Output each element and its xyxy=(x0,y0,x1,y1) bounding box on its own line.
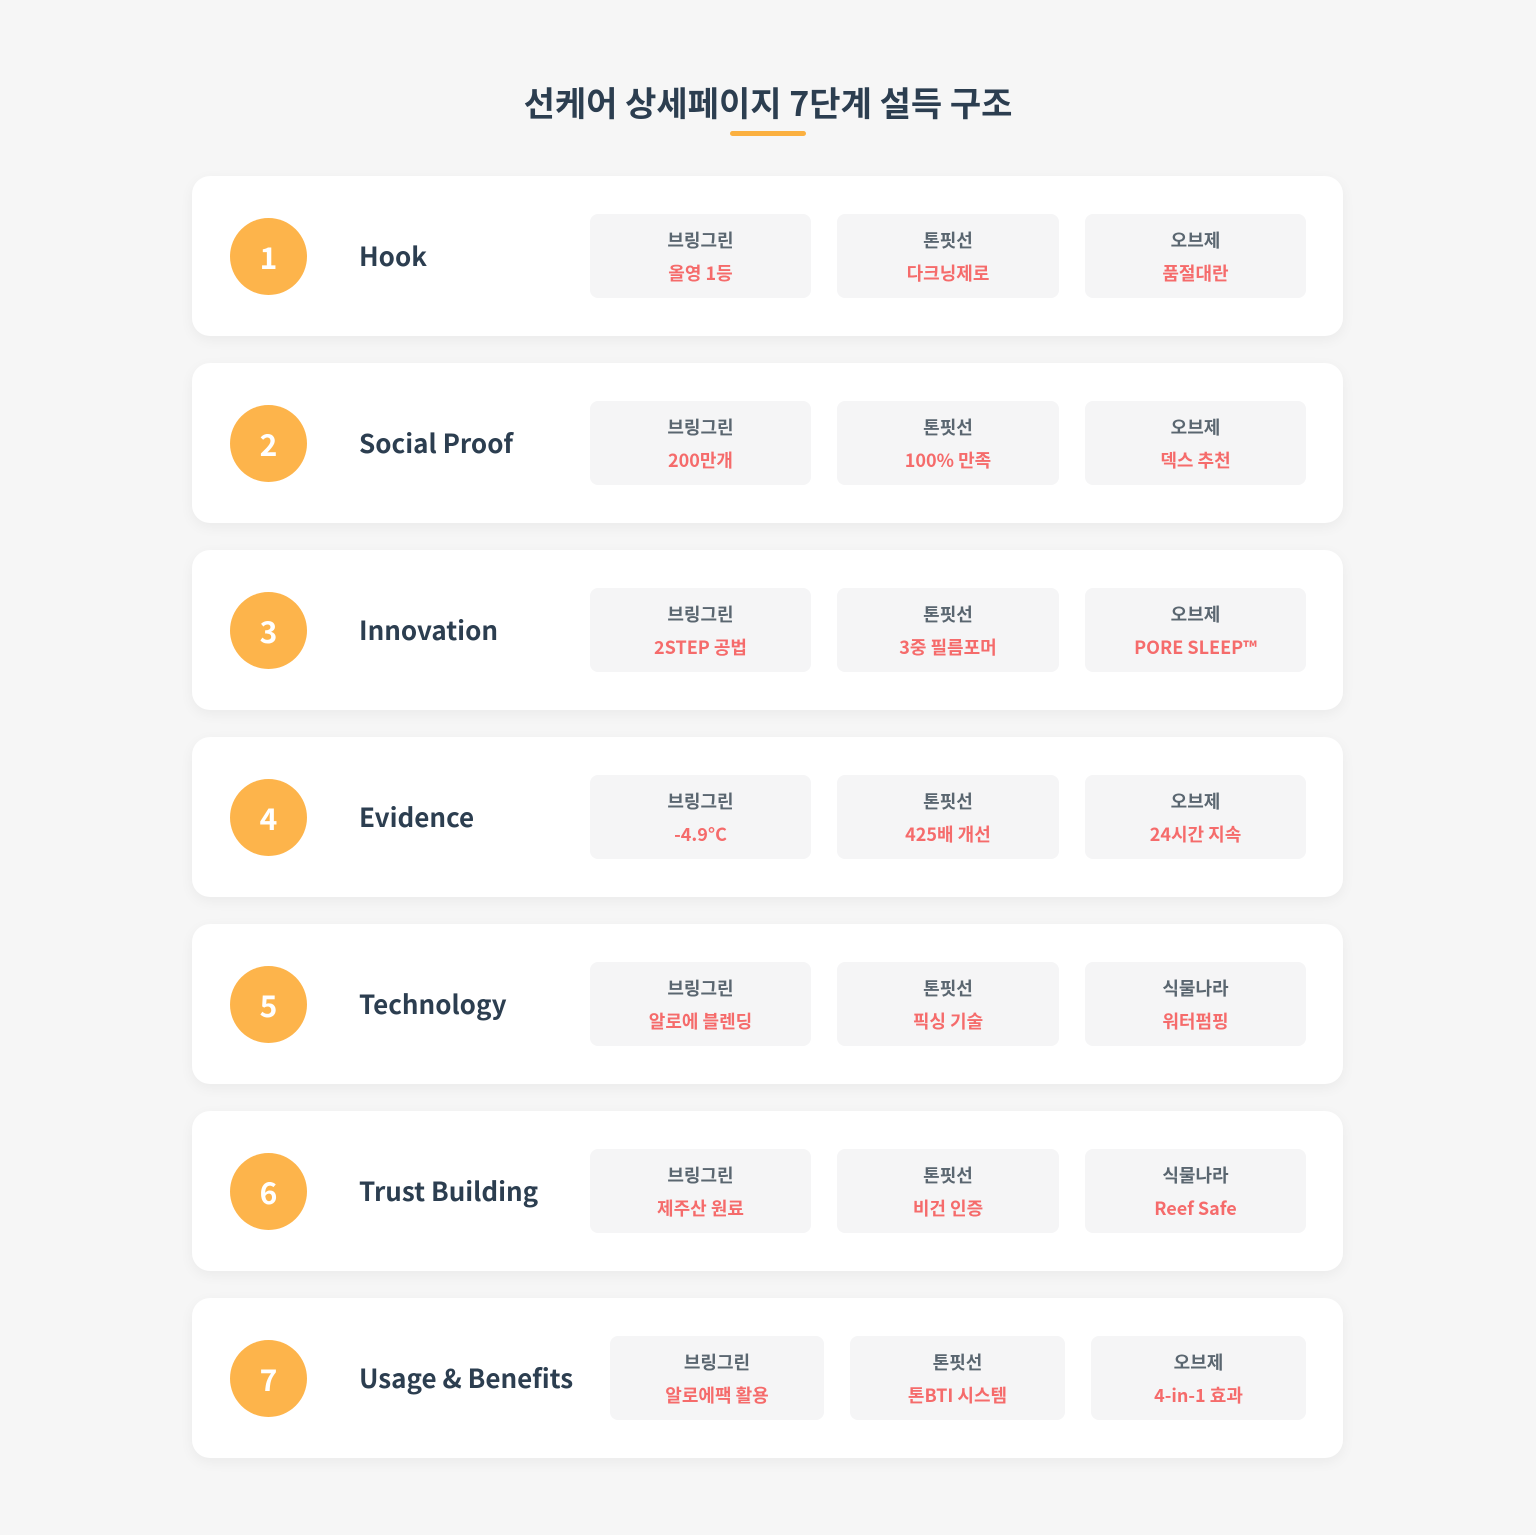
box xyxy=(1085,401,1306,485)
badge 6 xyxy=(230,1153,307,1230)
box: 톤핏선 xyxy=(923,414,973,440)
box: 톤핏선 xyxy=(923,227,973,253)
box: 브링그린 xyxy=(667,788,734,814)
box xyxy=(1085,588,1306,672)
box xyxy=(1085,775,1306,859)
box: -4.9°C xyxy=(674,821,727,847)
badge 6: 6 xyxy=(260,1169,277,1213)
box: 425배 개선 xyxy=(905,821,991,847)
box: 100% 만족 xyxy=(905,447,991,473)
badge 4 xyxy=(230,779,307,856)
box xyxy=(837,775,1059,859)
box: PORE SLEEP™ xyxy=(1134,634,1257,660)
badge 5 xyxy=(230,966,307,1043)
box xyxy=(1091,1336,1306,1420)
box: 덱스 추천 xyxy=(1160,447,1231,473)
box: 2STEP 공법 xyxy=(654,634,747,660)
box xyxy=(837,1149,1059,1233)
panel: step 7 xyxy=(192,1298,1343,1458)
box: 오브제 xyxy=(1171,601,1220,627)
box: 식물나라 xyxy=(1162,975,1229,1001)
box xyxy=(590,775,811,859)
badge 2: 2 xyxy=(260,421,277,465)
label: Usage & Benefits xyxy=(359,1359,573,1396)
label: Social Proof xyxy=(359,424,513,461)
box: 톤핏선 xyxy=(923,1162,973,1188)
box: 브링그린 xyxy=(667,414,734,440)
box: 톤핏선 xyxy=(933,1349,982,1375)
badge 4: 4 xyxy=(260,795,277,839)
box: 200만개 xyxy=(668,447,733,473)
box: 톤핏선 xyxy=(923,601,973,627)
box: 4-in-1 효과 xyxy=(1154,1382,1243,1408)
panel: step 6 xyxy=(192,1111,1343,1271)
box: 브링그린 xyxy=(667,975,734,1001)
box: 품절대란 xyxy=(1162,260,1229,286)
box: 제주산 원료 xyxy=(657,1195,744,1221)
label: Evidence xyxy=(359,798,474,835)
box: 오브제 xyxy=(1174,1349,1223,1375)
label: Technology xyxy=(359,985,507,1022)
box xyxy=(590,214,811,298)
box: Reef Safe xyxy=(1154,1195,1237,1221)
box xyxy=(850,1336,1065,1420)
box: 오브제 xyxy=(1171,227,1220,253)
panel: step 5 xyxy=(192,924,1343,1084)
badge 3 xyxy=(230,592,307,669)
box: 올영 1등 xyxy=(668,260,733,286)
box: 알로에 블렌딩 xyxy=(649,1008,752,1034)
box: 워터펌핑 xyxy=(1162,1008,1229,1034)
panel: step 3 xyxy=(192,550,1343,710)
box: 24시간 지속 xyxy=(1150,821,1241,847)
box: 다크닝제로 xyxy=(907,260,989,286)
box xyxy=(590,401,811,485)
box: 브링그린 xyxy=(667,601,734,627)
box: 알로에팩 활용 xyxy=(665,1382,769,1408)
label: Hook xyxy=(359,237,427,274)
box: 픽싱 기술 xyxy=(913,1008,983,1034)
badge 7: 7 xyxy=(260,1356,277,1400)
panel: step 2 xyxy=(192,363,1343,523)
badge 3: 3 xyxy=(260,608,277,652)
box: 톤핏선 xyxy=(923,975,973,1001)
box: 식물나라 xyxy=(1162,1162,1229,1188)
box: 비건 인증 xyxy=(913,1195,983,1221)
box: 3중 필름포머 xyxy=(899,634,997,660)
box: 브링그린 xyxy=(684,1349,750,1375)
box xyxy=(837,401,1059,485)
box xyxy=(590,962,811,1046)
badge 1: 1 xyxy=(260,234,277,278)
box xyxy=(1085,962,1306,1046)
box xyxy=(837,588,1059,672)
badge 1 xyxy=(230,218,307,295)
label: Innovation xyxy=(359,611,498,648)
label: Trust Building xyxy=(359,1172,538,1209)
box: 오브제 xyxy=(1171,788,1220,814)
box: 톤핏선 xyxy=(923,788,973,814)
box: 브링그린 xyxy=(667,227,734,253)
box: 오브제 xyxy=(1171,414,1220,440)
box xyxy=(1085,214,1306,298)
badge 7 xyxy=(230,1340,307,1417)
title: 선케어 상세페이지 7단계 설득 구조 xyxy=(524,77,1012,126)
panel: step 4 xyxy=(192,737,1343,897)
badge 5: 5 xyxy=(260,982,277,1026)
box xyxy=(837,214,1059,298)
box xyxy=(590,588,811,672)
box: 톤BTI 시스템 xyxy=(908,1382,1007,1408)
badge 2 xyxy=(230,405,307,482)
box xyxy=(610,1336,824,1420)
panel: step 1 xyxy=(192,176,1343,336)
box xyxy=(837,962,1059,1046)
box xyxy=(590,1149,811,1233)
box: 브링그린 xyxy=(667,1162,734,1188)
box xyxy=(1085,1149,1306,1233)
